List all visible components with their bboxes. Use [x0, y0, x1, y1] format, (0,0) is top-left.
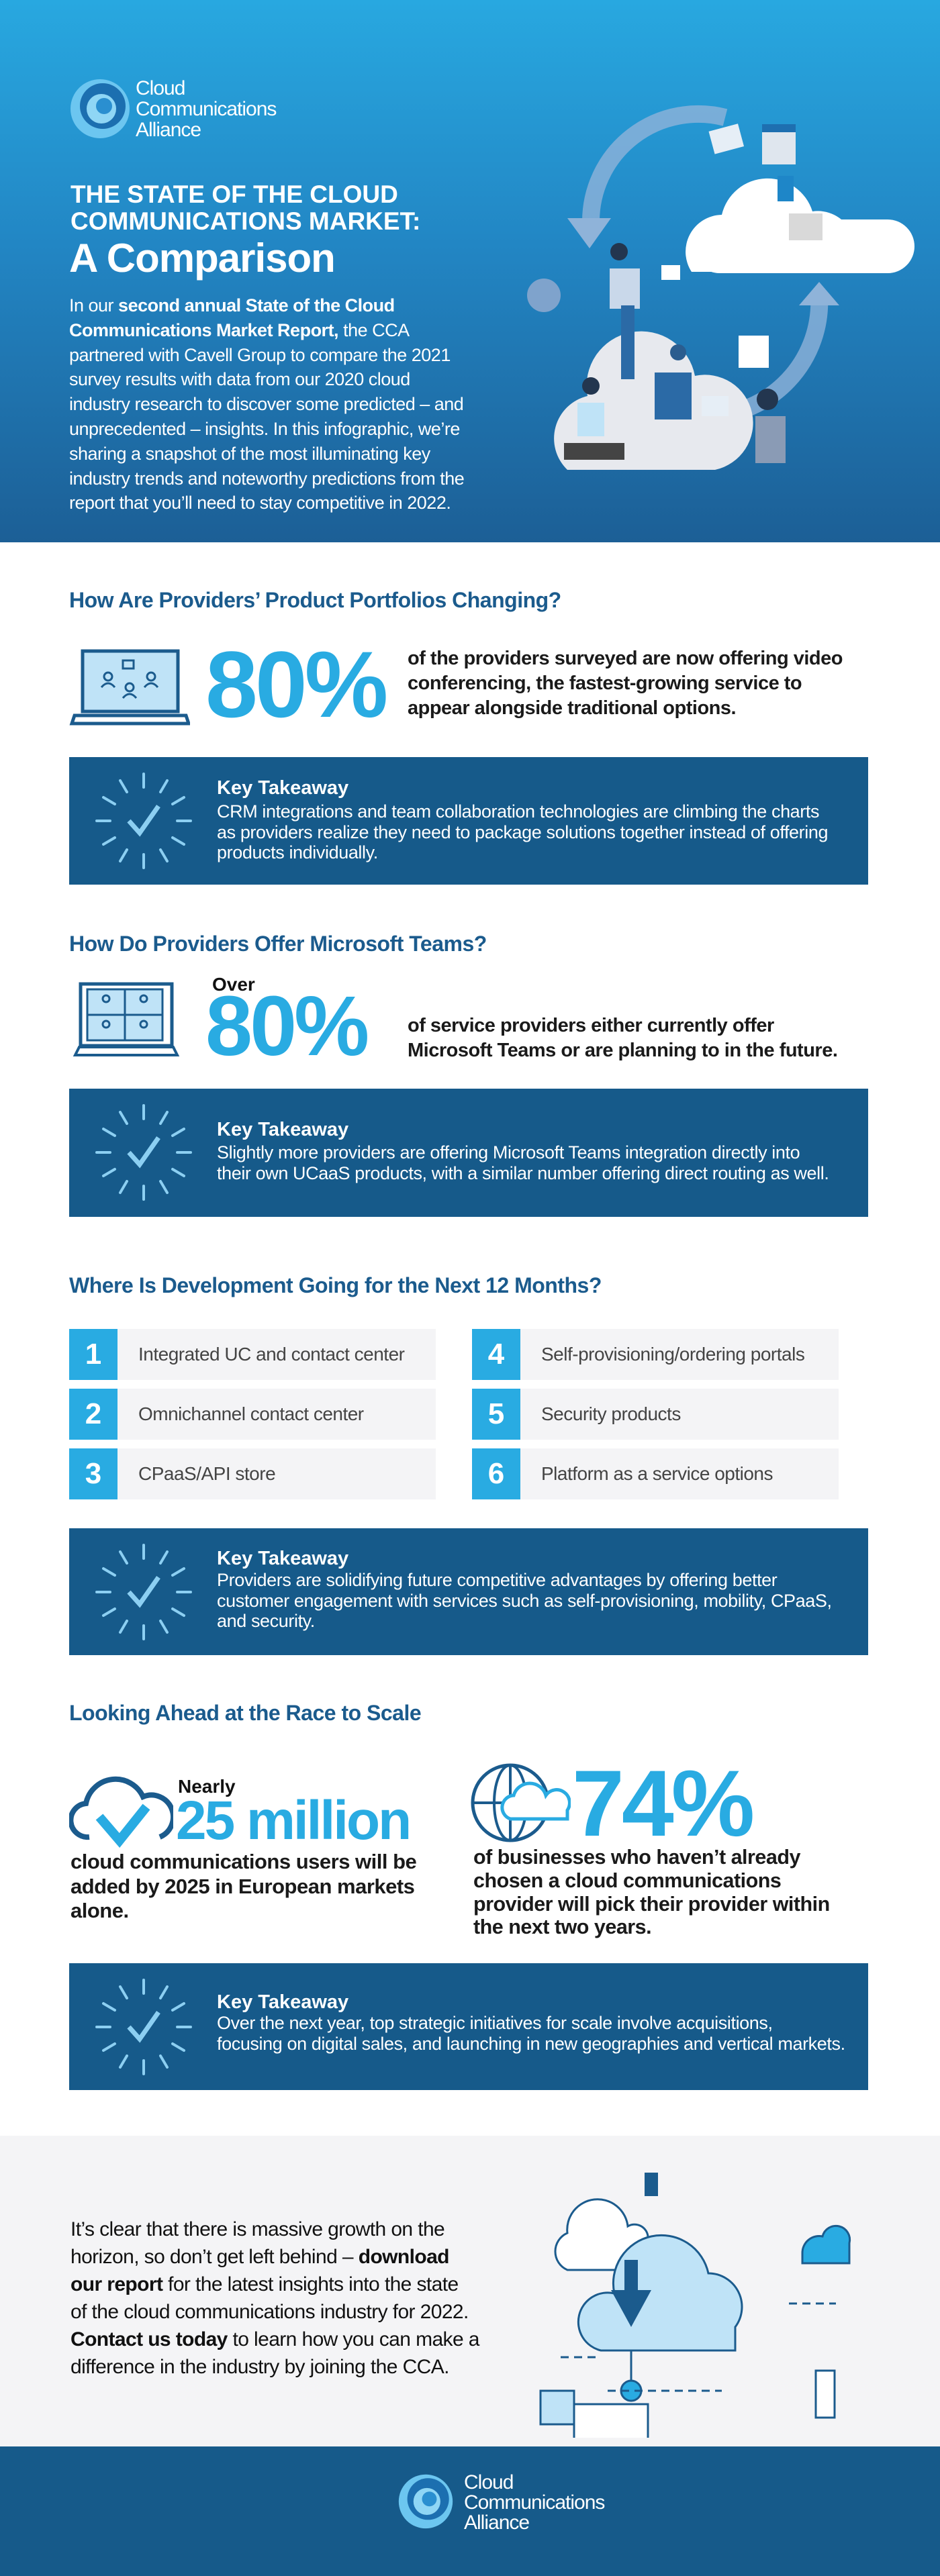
- key takeaway 3: [69, 1528, 868, 1655]
- closing text: It’s clear that there is massive growth on the: [70, 2218, 444, 2240]
- stat text: 25 million: alone.: [70, 1899, 129, 1922]
- footer: [0, 2446, 940, 2576]
- icon: globe cloud: [471, 1764, 571, 1842]
- key takeaway 4: Key Takeaway: [217, 1991, 348, 2013]
- title: [70, 181, 420, 235]
- icon: sunburst check: [95, 1979, 192, 2075]
- logo text: Alliance: [136, 119, 201, 141]
- item 2: Omnichannel contact center: [138, 1403, 364, 1424]
- section heading: development: Where Is Development Going for the Next 12 Months?: [69, 1273, 602, 1297]
- item 3: [69, 1448, 436, 1499]
- item 4: [472, 1329, 839, 1380]
- key takeaway 4: [69, 1963, 868, 2090]
- stat text: 74%: [473, 1846, 830, 1938]
- logo text: Communications: [136, 98, 276, 120]
- stat text: 74%: of businesses who haven’t already: [473, 1846, 800, 1869]
- section heading: portfolios: How Are Providers’ Product Portfolios Changing?: [69, 588, 561, 612]
- footer logo text: Communications: [464, 2491, 604, 2514]
- key takeaway 3: and security.: [217, 1611, 315, 1631]
- item 1: 1: [85, 1338, 101, 1371]
- stat: 74%: 74%: [572, 1750, 752, 1856]
- intro paragraph: survey results with data from our 2020 cloud: [69, 369, 410, 389]
- stat text teams: of service providers either currently offer: [408, 1015, 774, 1036]
- header panel: [0, 0, 940, 542]
- stat text: of the providers surveyed are now offering video: [408, 648, 843, 669]
- item 1: Integrated UC and contact center: [138, 1344, 404, 1365]
- closing panel: [0, 2136, 940, 2446]
- intro paragraph: sharing a snapshot of the most illuminating key: [69, 444, 430, 464]
- stat text: 25 million: [70, 1850, 416, 1922]
- key takeaway 4: focusing on digital sales, and launching in new geographies and vertical markets.: [217, 2034, 845, 2054]
- icon: logo swirl: [70, 79, 130, 138]
- key takeaway 1: Key Takeaway: [217, 777, 348, 799]
- key takeaway 1: products individually.: [217, 842, 378, 862]
- key takeaway 3: Key Takeaway: [217, 1548, 348, 1569]
- key takeaway 3: customer engagement with services such as self-provisioning, mobility, CPaaS,: [217, 1591, 832, 1611]
- stat text: conferencing, the fastest-growing service to: [408, 673, 802, 694]
- item 3: CPaaS/API store: [138, 1463, 275, 1484]
- item 3: 3: [85, 1457, 101, 1490]
- stat text teams: [408, 1015, 837, 1061]
- item 5: [472, 1389, 839, 1440]
- logo text: [136, 77, 277, 141]
- key takeaway 2: [69, 1089, 868, 1217]
- icon: laptop video conference: [70, 650, 190, 725]
- item 6: 6: [488, 1457, 504, 1490]
- item 6: Platform as a service options: [541, 1463, 773, 1484]
- intro paragraph: report that you’ll need to stay competitive in 2022.: [69, 493, 451, 513]
- logo text: Cloud: [136, 77, 185, 99]
- logo: [70, 77, 277, 141]
- item 4: 4: [488, 1338, 504, 1371]
- item 5: Security products: [541, 1403, 681, 1424]
- footer logo: [399, 2471, 604, 2534]
- closing text: difference in the industry by joining the CCA.: [70, 2356, 449, 2378]
- closing text: our report for the latest insights into the state: [70, 2273, 459, 2295]
- label: Over: Over: [212, 974, 255, 995]
- list: development priorities: [69, 1329, 839, 1499]
- stat text: appear alongside traditional options.: [408, 697, 736, 719]
- closing text: [70, 2218, 479, 2378]
- section heading: scale: Looking Ahead at the Race to Scale: [69, 1701, 421, 1725]
- illustration: people and clouds: [527, 105, 914, 470]
- footer logo text: Cloud: [464, 2471, 513, 2493]
- item 1: [69, 1329, 436, 1380]
- icon: sunburst check: [95, 1544, 192, 1640]
- section heading: Teams: How Do Providers Offer Microsoft Teams?: [69, 932, 487, 956]
- intro paragraph: [69, 295, 464, 513]
- stat text: 74%: provider will pick their provider within: [473, 1893, 830, 1916]
- intro paragraph: industry trends and noteworthy predictions from the: [69, 468, 464, 489]
- stat: 25 million: 25 million: [176, 1790, 410, 1851]
- key takeaway 4: Over the next year, top strategic initiatives for scale involve acquisitions,: [217, 2013, 773, 2033]
- closing text: Contact us today to learn how you can make a: [70, 2328, 479, 2350]
- item 6: [472, 1448, 839, 1499]
- stat: 80%: 80%: [205, 632, 385, 737]
- stat text: 74%: chosen a cloud communications: [473, 1869, 781, 1892]
- intro paragraph: In our second annual State of the Cloud: [69, 295, 395, 315]
- icon: cloud check: [69, 1776, 173, 1848]
- label: Nearly: Nearly: [178, 1776, 236, 1797]
- stat text: 25 million: added by 2025 in European markets: [70, 1874, 414, 1898]
- key takeaway 3: Providers are solidifying future competitive advantages by offering better: [217, 1570, 777, 1590]
- title: THE STATE OF THE CLOUD: [70, 181, 398, 208]
- intro paragraph: industry research to discover some predicted – and: [69, 394, 463, 414]
- key takeaway 2: Key Takeaway: [217, 1119, 348, 1140]
- stat text: 74%: the next two years.: [473, 1916, 651, 1938]
- intro paragraph: partnered with Cavell Group to compare the 2021: [69, 345, 451, 365]
- subtitle: A Comparison: [69, 236, 335, 281]
- intro paragraph: Communications Market Report, the CCA: [69, 320, 410, 340]
- key takeaway 1: [69, 757, 868, 885]
- stat text: [408, 648, 843, 719]
- icon: laptop teams grid: [73, 983, 180, 1056]
- key takeaway 1: CRM integrations and team collaboration technologies are climbing the charts: [217, 801, 819, 822]
- stat text: 25 million: cloud communications users will be: [70, 1850, 416, 1873]
- icon: sunburst check: [95, 1104, 192, 1201]
- key takeaway 2: Slightly more providers are offering Microsoft Teams integration directly into: [217, 1142, 800, 1162]
- item 5: 5: [488, 1397, 504, 1430]
- key takeaway 2: their own UCaaS products, with a similar number offering direct routing as well.: [217, 1162, 829, 1183]
- item 2: [69, 1389, 436, 1440]
- illustration: cloud download: [540, 2173, 851, 2438]
- icon: logo swirl: [399, 2474, 453, 2529]
- intro paragraph: unprecedented – insights. In this infographic, we’re: [69, 419, 460, 439]
- item 2: 2: [85, 1397, 101, 1430]
- key takeaway 1: as providers realize they need to package solutions together instead of offering: [217, 822, 828, 842]
- footer logo text: Alliance: [464, 2512, 529, 2534]
- closing text: of the cloud communications industry for 2022.: [70, 2301, 469, 2323]
- item 4: Self-provisioning/ordering portals: [541, 1344, 804, 1365]
- stat: over 80%: 80%: [205, 979, 367, 1073]
- stat text teams: Microsoft Teams or are planning to in the future.: [408, 1040, 837, 1061]
- icon: sunburst check: [95, 773, 192, 869]
- footer logo text: [464, 2471, 604, 2534]
- closing text: horizon, so don’t get left behind – download: [70, 2246, 449, 2268]
- title: COMMUNICATIONS MARKET:: [70, 207, 420, 235]
